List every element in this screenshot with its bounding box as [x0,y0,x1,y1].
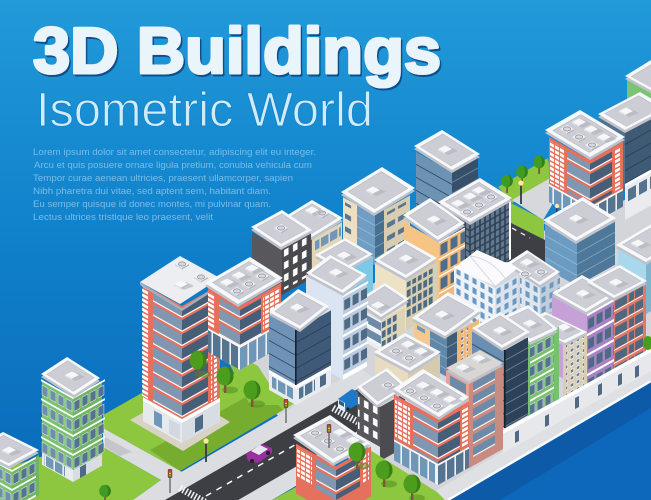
body paragraph: Eu semper quisque id donec montes, mi pulvinar quam. [33,198,271,209]
waterfront plinth with windows [503,348,651,453]
vehicle: purple car [246,444,272,463]
building: dark grey, back [251,210,312,295]
body paragraph: Nibh pharetra dui vitae, sed aptent sem, habitant diam. [33,185,271,196]
building: red, right edge [587,265,647,372]
road [165,382,370,500]
trees and lamp on right lawn [501,156,545,204]
building: low roof with units [374,333,441,395]
building: red with six roof units, top right [545,110,625,225]
building: white curved roof [454,250,518,336]
building: low with blue bands [357,283,409,351]
ground: sidewalks [103,368,380,500]
building: low blue-walled behind light tower [315,238,373,307]
building: far right green [625,60,651,160]
building: bright green [500,305,559,420]
ground: lawn by tall tower [103,345,300,471]
building: dark grey, front [357,368,407,461]
ground: river [448,380,651,500]
building: tan and blue [341,167,415,265]
street lamp [203,438,209,462]
building: green small, bottom left [0,432,39,500]
building: tall red tower with concrete pad [130,256,230,451]
building: orange [403,198,465,304]
body paragraph: Tempor curae aenean ultricies, praesent ullamcorper, sapien [33,172,293,183]
building: big red with six units [393,369,469,485]
trees [99,336,651,500]
body paragraph: Lorem ipsum dolor sit amet consectetur, adipiscing elit eu integer. [33,146,316,157]
building: purple [552,275,616,392]
building: dark glass tower, centre top [414,130,480,232]
building: dark tower, top right [598,92,651,220]
body paragraph: Lectus ultrices tristique leo praesent, velit [33,211,213,222]
building: red beside the tower [205,257,283,370]
building: beige narrow [523,312,587,400]
body paragraph [33,146,316,222]
traffic lights [168,399,331,493]
title: 3D Buildings [33,14,441,87]
street lamp behind blue tower [555,204,559,214]
vehicle: blue truck [338,389,358,412]
building: dark blue tower [472,312,530,428]
building: orange and dark glass, front [412,292,481,377]
building: dark windows with six roof units [438,178,512,282]
building: blue tower, right [543,197,616,286]
body paragraph: Arcu et quis posuere ornare ligula pretium, conubia vehicula cum [34,159,312,170]
lawn and trees by red front buildings [272,450,445,500]
building: back beige [281,200,343,289]
building: light blue, right edge [616,222,651,314]
ground: lawn and small street by the red building, right [498,158,552,262]
building: green tall, left [41,357,105,482]
building: tan with dark windows [374,240,437,330]
building: dark glass with white base [269,289,331,405]
ground: central pavement [238,190,651,500]
building: pink [446,350,503,468]
ground: lower left lawn [0,447,161,500]
building: front red on road corner [293,415,371,500]
building: light tall [306,255,368,380]
subtitle: Isometric World [36,84,373,137]
building: grey, behind white roof [507,250,560,322]
